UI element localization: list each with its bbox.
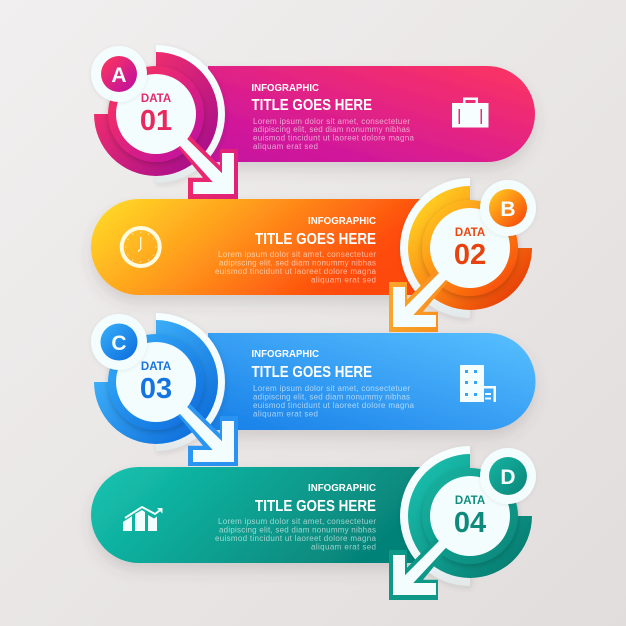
white half disc D bbox=[400, 446, 470, 586]
letter badge A bbox=[91, 46, 147, 102]
heading D: TITLE GOES HERE bbox=[255, 498, 376, 515]
inner ring C bbox=[108, 334, 204, 430]
inner ring B bbox=[422, 200, 518, 296]
body text B bbox=[215, 250, 377, 284]
letter badge C: C bbox=[111, 332, 127, 355]
arrow C bbox=[171, 401, 234, 462]
body text C: aliquam erat sed bbox=[253, 410, 318, 418]
icon: briefcase bbox=[452, 98, 488, 128]
letter badge D: D bbox=[500, 466, 516, 489]
circle badge B bbox=[389, 178, 536, 332]
ring B bbox=[408, 186, 532, 310]
circle badge C bbox=[91, 313, 238, 466]
letter badge B bbox=[480, 180, 536, 236]
panel: C banner bbox=[208, 333, 536, 430]
arrow D bbox=[393, 535, 455, 595]
data label C: 03 bbox=[140, 373, 172, 405]
letter badge C bbox=[91, 314, 147, 370]
arrow outline A bbox=[171, 132, 238, 199]
bar B bbox=[91, 199, 430, 295]
letter badge B: B bbox=[500, 198, 516, 221]
icon: building bbox=[460, 365, 496, 402]
data label D: 04 bbox=[454, 507, 486, 539]
inner ring D bbox=[422, 468, 518, 564]
arrow outline B bbox=[389, 266, 455, 332]
white half disc A bbox=[156, 45, 225, 183]
ring C bbox=[94, 320, 218, 444]
heading B bbox=[255, 215, 376, 248]
heading A: INFOGRAPHIC bbox=[252, 82, 319, 94]
bar D bbox=[91, 467, 430, 563]
body text D: euismod tincidunt ut laoreet dolore magna bbox=[215, 534, 377, 543]
heading A: TITLE GOES HERE bbox=[252, 97, 372, 114]
white half disc C bbox=[156, 313, 225, 451]
body text B: euismod tincidunt ut laoreet dolore magna bbox=[215, 267, 377, 276]
panel: B banner bbox=[91, 199, 430, 295]
white half disc B bbox=[400, 178, 470, 318]
arrow outline C bbox=[171, 400, 238, 466]
bar A bbox=[208, 66, 535, 162]
icon: clock bbox=[122, 228, 160, 266]
white disc C bbox=[116, 342, 196, 422]
body text C: Lorem ipsum dolor sit amet, consectetuer bbox=[253, 384, 410, 393]
body text D: aliquam erat sed bbox=[311, 542, 376, 552]
body text A: euismod tincidunt ut laoreet dolore magna bbox=[253, 134, 415, 142]
circle badge A bbox=[91, 45, 238, 199]
body text B: Lorem ipsum dolor sit amet, consectetuer bbox=[218, 250, 376, 259]
body text B: aliquam erat sed bbox=[311, 276, 376, 284]
white disc B bbox=[430, 208, 510, 288]
body text D: adipiscing elit, sed diam nonummy nibhas bbox=[219, 526, 376, 534]
ring A bbox=[94, 52, 218, 176]
inner ring A bbox=[108, 66, 204, 162]
body text A bbox=[253, 117, 415, 151]
white disc A bbox=[116, 74, 196, 154]
heading D bbox=[255, 482, 376, 515]
body text D bbox=[215, 517, 377, 552]
body text C: adipiscing elit, sed diam nonummy nibhas bbox=[253, 392, 410, 402]
data label B: 02 bbox=[454, 239, 486, 271]
arrow B bbox=[393, 267, 455, 327]
white disc D bbox=[430, 476, 510, 556]
panel: D banner bbox=[91, 467, 430, 563]
circle badge D bbox=[389, 446, 536, 600]
heading C: INFOGRAPHIC bbox=[252, 348, 319, 360]
data label D: DATA bbox=[455, 495, 485, 507]
body text C: euismod tincidunt ut laoreet dolore magna bbox=[253, 401, 415, 410]
heading C: TITLE GOES HERE bbox=[252, 364, 372, 381]
letter badge A: A bbox=[111, 64, 127, 87]
data label A: 01 bbox=[140, 105, 172, 137]
body text A: aliquam erat sed bbox=[253, 142, 318, 151]
bar C bbox=[208, 333, 536, 430]
ring D bbox=[408, 454, 532, 578]
heading B: TITLE GOES HERE bbox=[255, 231, 376, 248]
body text A: adipiscing elit, sed diam nonummy nibhas bbox=[253, 125, 410, 134]
heading D: INFOGRAPHIC bbox=[308, 482, 376, 494]
data label B: DATA bbox=[455, 227, 485, 239]
body text A: Lorem ipsum dolor sit amet, consectetuer bbox=[253, 117, 410, 126]
body text C bbox=[253, 384, 415, 418]
letter badge D bbox=[480, 448, 536, 504]
heading B: INFOGRAPHIC bbox=[308, 215, 376, 227]
data label A: DATA bbox=[141, 93, 171, 105]
panel: A banner bbox=[208, 66, 535, 162]
body text D: Lorem ipsum dolor sit amet, consectetuer bbox=[218, 517, 376, 526]
heading C bbox=[252, 348, 372, 381]
heading A bbox=[252, 82, 372, 114]
body text B: adipiscing elit, sed diam nonummy nibhas bbox=[219, 258, 376, 268]
arrow A bbox=[171, 133, 234, 194]
data label C: DATA bbox=[141, 361, 171, 373]
arrow outline D bbox=[389, 534, 455, 600]
icon: chart bbox=[123, 507, 162, 531]
